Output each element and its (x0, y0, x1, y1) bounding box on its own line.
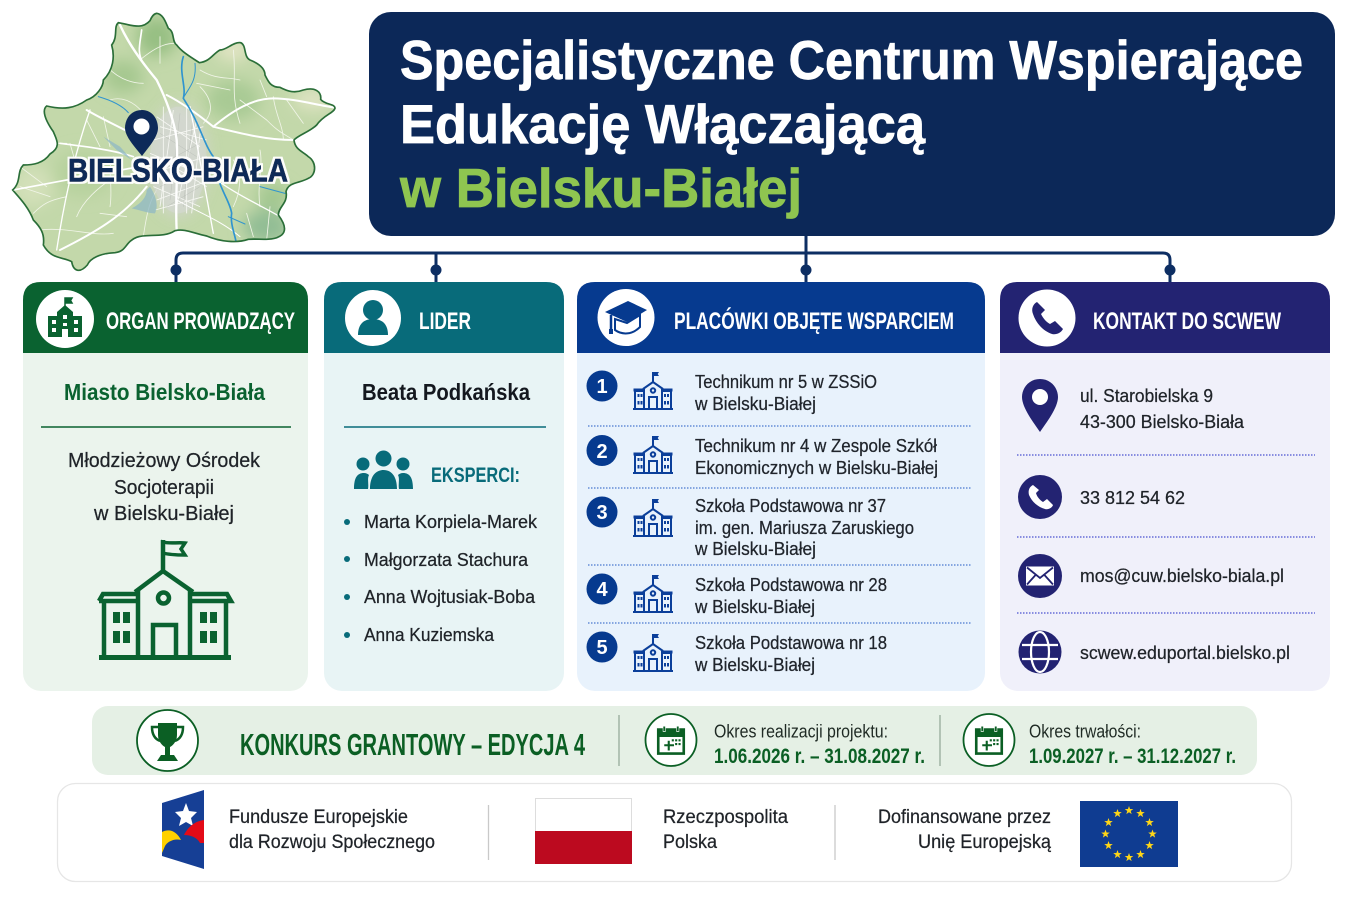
logo text (229, 806, 435, 853)
email (1018, 554, 1284, 598)
item 1: w Bielsku-Białej (694, 393, 816, 414)
address: 43-300 Bielsko-Biała (1080, 411, 1245, 432)
heading: PLACÓWKI OBJĘTE WSPARCIEM (674, 307, 954, 335)
experts list (344, 511, 538, 645)
icon: phone in circle (1018, 290, 1076, 346)
icon: trophy (137, 710, 198, 771)
item 4: w Bielsku-Białej (694, 596, 815, 617)
logo text: Dofinansowane: Unię Europejską (918, 831, 1051, 853)
durability period: Okres trwałości: (1029, 722, 1141, 742)
phone (1018, 475, 1185, 519)
item 4: Szkoła Podstawowa nr 28 (695, 574, 887, 595)
heading: ORGAN PROWADZĄCY (106, 308, 295, 335)
logo text: Dofinansowane (878, 806, 1051, 853)
phone: 33 812 54 62 (1080, 487, 1185, 508)
project period (646, 714, 925, 768)
panel: lider (324, 282, 564, 691)
icon: graduation cap in circle (598, 289, 654, 346)
item 1 (586, 370, 877, 414)
panel: kontakt (1000, 282, 1330, 691)
item 2: 2 (596, 441, 608, 463)
item 1: 1 (596, 376, 608, 398)
experts list: Małgorzata Stachura (364, 549, 529, 570)
address (1022, 379, 1245, 432)
map city label: BIELSKO-BIAŁA (68, 152, 288, 188)
logo text: dla Rozwoju Społecznego (229, 831, 435, 853)
connector lines (170, 236, 1176, 282)
item 4: 4 (596, 579, 608, 601)
item 5: w Bielsku-Białej (694, 654, 815, 675)
project period: Okres realizacji projektu: (714, 722, 888, 742)
icon: person in circle (345, 290, 401, 346)
panel: placówki (577, 282, 985, 691)
heading: KONTAKT DO SCWEW (1093, 308, 1281, 335)
item 4 (586, 574, 887, 617)
logo text: Fundusze Europejskie (229, 806, 408, 828)
logo text: Rzeczpospolita Polska: Polska (663, 831, 717, 853)
title: w Bielsku-Białej (399, 157, 802, 219)
item 3: 3 (596, 502, 608, 524)
experts heading: EKSPERCI: (431, 464, 520, 487)
main roads (13, 25, 333, 250)
heading: LIDER (419, 308, 471, 335)
leader name: Beata Podkańska (362, 379, 530, 405)
footer: logos (58, 784, 1292, 882)
icon: school in circle (36, 290, 94, 348)
title panel (369, 12, 1335, 236)
item 5: 5 (596, 637, 608, 659)
map: Bielsko-Biała (12, 12, 336, 272)
durability period (964, 714, 1236, 768)
logo text: Rzeczpospolita Polska: Rzeczpospolita (663, 806, 788, 828)
logo: Fundusze Europejskie (162, 790, 435, 869)
website: scwew.eduportal.bielsko.pl (1080, 642, 1290, 663)
icon: school building (99, 540, 231, 658)
title (399, 29, 1303, 219)
email: mos@cuw.bielsko-biala.pl (1080, 565, 1284, 586)
logo: EU flag (1080, 801, 1178, 867)
item 2 (586, 435, 938, 478)
logo text: Rzeczpospolita Polska (663, 806, 788, 853)
banner title: KONKURS GRANTOWY – EDYCJA 4 (240, 727, 585, 762)
project period: 1.06.2026 r. – 31.08.2027 r. (714, 745, 925, 768)
item 2: Ekonomicznych w Bielsku-Białej (695, 457, 938, 478)
logo text: Dofinansowane: Dofinansowane przez (878, 806, 1051, 828)
item 3 (586, 495, 914, 559)
organ name: Miasto Bielsko-Biała (64, 379, 265, 405)
experts list: Marta Korpiela-Marek (364, 511, 538, 532)
item 5 (586, 632, 887, 675)
item 3: w Bielsku-Białej (694, 538, 816, 559)
institution name: Młodzieżowy Ośrodek (68, 449, 261, 472)
website (1018, 630, 1290, 674)
item 3: im. gen. Mariusza Zaruskiego (695, 517, 914, 538)
icon: location pin (125, 110, 158, 156)
institution name: Socjoterapii (114, 476, 214, 499)
icon: experts group (354, 450, 413, 489)
experts list: Anna Wojtusiak-Boba (364, 586, 536, 607)
banner: konkurs grantowy (92, 706, 1257, 775)
title: Edukację Włączającą (400, 93, 925, 155)
institution name (68, 449, 261, 525)
durability period: 1.09.2027 r. – 31.12.2027 r. (1029, 745, 1236, 768)
panel: organ prowadzący (23, 282, 308, 691)
item 3: Szkoła Podstawowa nr 37 (695, 495, 886, 516)
item 5: Szkoła Podstawowa nr 18 (695, 632, 887, 653)
logo: flag of Poland (535, 798, 632, 864)
experts list: Anna Kuziemska (364, 624, 495, 645)
item 2: Technikum nr 4 w Zespole Szkół (695, 435, 937, 456)
address: ul. Starobielska 9 (1080, 385, 1213, 406)
item 1: Technikum nr 5 w ZSSiO (695, 371, 877, 392)
institution name: w Bielsku-Białej (93, 502, 234, 525)
thin roads (20, 37, 303, 240)
